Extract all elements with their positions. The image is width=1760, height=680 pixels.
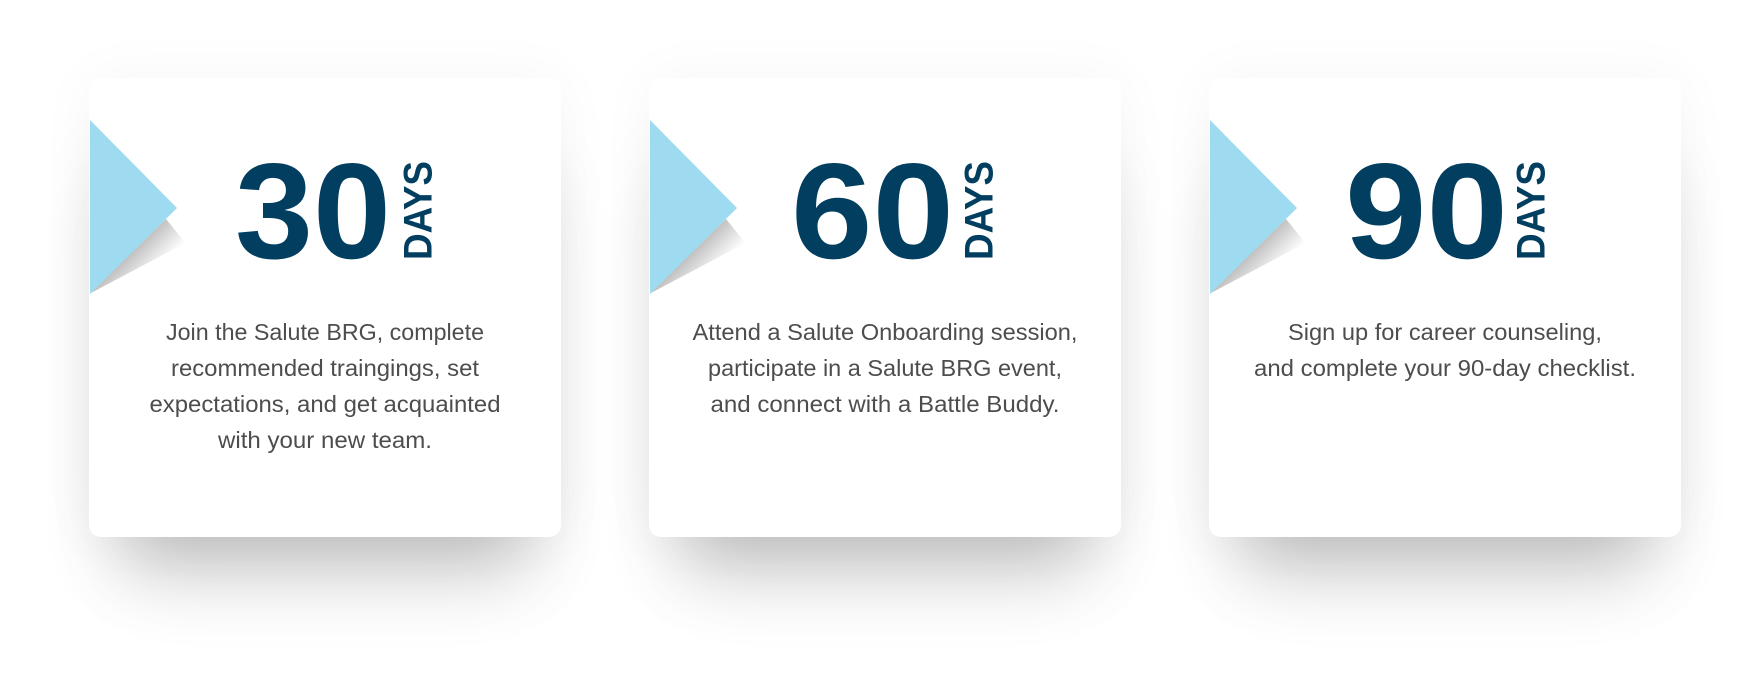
icon: arrow tab xyxy=(1209,120,1306,294)
text block: 90 day description: Sign up for career counseling, xyxy=(1288,319,1602,345)
text block: 90 day description xyxy=(1254,319,1636,381)
label: days: DAYS xyxy=(958,161,1002,260)
label: days: DAYS xyxy=(1510,161,1554,260)
number: 60: 60 xyxy=(791,135,954,287)
panel: 90 days xyxy=(1209,78,1681,537)
label: days: DAYS xyxy=(396,161,440,260)
number: 30: 30 xyxy=(235,135,391,287)
text block: 60 day description xyxy=(692,319,1078,417)
text block: 30 day description: expectations, and get acquainted xyxy=(150,391,501,417)
panel: 30 days xyxy=(89,78,561,537)
text block: 30 day description: Join the Salute BRG, complete xyxy=(166,319,484,345)
icon: arrow tab xyxy=(89,120,186,294)
number: 90: 90 xyxy=(1345,135,1508,287)
text block: 30 day description xyxy=(150,319,501,453)
text block: 90 day description: and complete your 90-day checklist. xyxy=(1254,355,1636,381)
icon: arrow tab xyxy=(649,120,746,294)
text block: 30 day description: recommended traingings, set xyxy=(171,355,480,381)
text block: 60 day description: and connect with a Battle Buddy. xyxy=(710,391,1060,417)
text block: 30 day description: with your new team. xyxy=(217,427,432,453)
panel: 60 days xyxy=(649,78,1121,537)
text block: 60 day description: participate in a Salute BRG event, xyxy=(708,355,1062,381)
text block: 60 day description: Attend a Salute Onboarding session, xyxy=(692,319,1078,345)
